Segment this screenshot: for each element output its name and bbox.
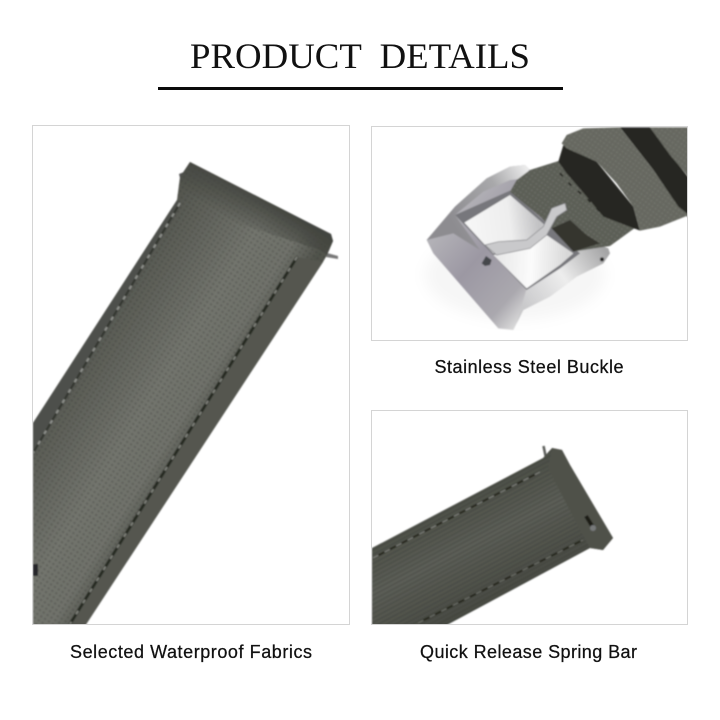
- spring bar slot: [586, 516, 594, 529]
- caption: quick release spring bar: Quick Release Spring Bar: [420, 642, 637, 662]
- tongue: [485, 203, 567, 255]
- strap through buckle: [510, 158, 637, 252]
- window rim: [455, 191, 580, 290]
- shadow under keepers: [558, 145, 640, 231]
- strap holes: [560, 173, 600, 212]
- keeper loop one: [562, 127, 689, 231]
- lug hole: [600, 257, 604, 261]
- panel: waterproof fabric strap: [32, 126, 350, 626]
- caption: stainless steel buckle: Stainless Steel Buckle: [434, 357, 624, 377]
- keeper loop two: [650, 127, 689, 177]
- title underline: [158, 87, 563, 90]
- panel: stainless steel buckle: [372, 126, 689, 340]
- buckle frame: [427, 165, 610, 330]
- panel: quick release strap: [372, 410, 688, 626]
- buckle shadow: [436, 264, 594, 308]
- caption: waterproof fabrics: Selected Waterproof Fabrics: [70, 642, 312, 662]
- window plate upper: [464, 195, 547, 253]
- window plate lower: [493, 235, 573, 288]
- title: PRODUCT DETAILS: [190, 36, 530, 76]
- buckle and strap photo: [427, 127, 689, 330]
- strap photo: fabric close-up: [33, 162, 338, 626]
- strap photo: quick release end: [372, 446, 613, 626]
